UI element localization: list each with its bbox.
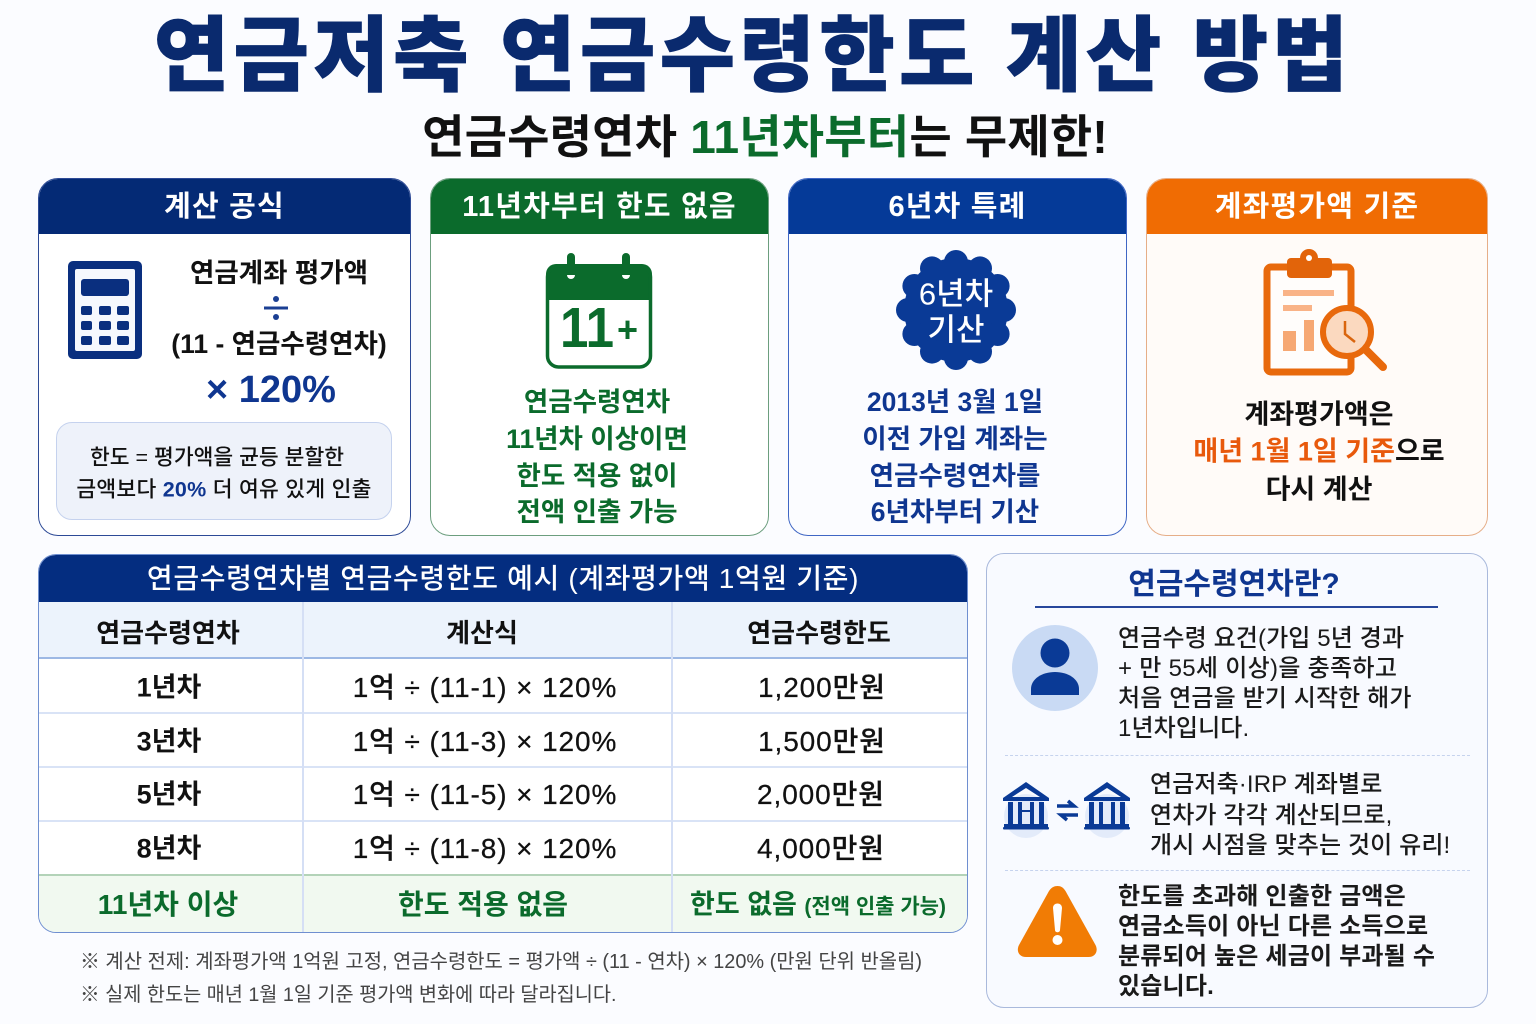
text: 다시 계산 [1266,474,1372,504]
text: 개시 시점을 맞추는 것이 유리! [1150,832,1450,859]
text: 연금수령한도 [747,618,891,648]
table: limit examples [38,554,968,933]
heading: formula: 계산 공식 [164,191,285,223]
column dividers [302,602,304,933]
text: 1년차입니다. [1118,715,1249,742]
text: 연차가 각각 계산되므로, [1150,802,1392,829]
highlighted row [39,874,969,934]
formula denominator: (11 - 연금수령연차) [171,329,387,359]
row: year 11+: 11년차 이상 [98,889,238,920]
badge text: 6년차 [919,276,993,312]
icon: calendar 11+: + [617,309,638,350]
icon: calendar 11+ [546,253,652,369]
multiplier: × 120% [206,369,336,411]
heading: year 6 [788,178,1127,234]
text: 1,500만원 [758,726,886,757]
text: 2,000만원 [757,779,885,810]
dashed divider 2 [1005,870,1470,871]
panel: year 6 exception [788,178,1127,536]
text: 분류되어 높은 세금이 부과될 수 [1118,943,1435,970]
row: year 1: 1년차 [137,672,201,702]
text: 매년 1월 1일 기준으로 [1193,436,1445,466]
title: 연금저축 연금수령한도 계산 방법 [154,11,1352,102]
text: 1억 ÷ (11-5) × 120% [353,779,617,810]
footnote 2: ※ 실제 한도는 매년 1월 1일 기준 평가액 변화에 따라 달라집니다. [80,984,616,1006]
icon: person [1012,625,1098,711]
heading underline [1035,606,1438,608]
dashed divider 1 [1005,755,1470,756]
text: + 만 55세 이상)을 충족하고 [1118,655,1397,682]
table title bar: 연금수령연차별 연금수령한도 예시 (계좌평가액 1억원 기준) [147,563,859,594]
heading: year 6: 6년차 특례 [888,191,1027,223]
text: 한도 적용 없음 [398,889,568,920]
row dividers [39,712,969,714]
table header labels: 연금수령연차 [96,618,240,648]
text: 전액 인출 가능 [516,497,678,527]
text: 1억 ÷ (11-8) × 120% [353,833,617,864]
row: year 3: 3년차 [137,726,201,756]
callout: limit explanation [56,422,392,520]
text: 4,000만원 [757,833,885,864]
formula numerator: 연금계좌 평가액 [190,258,368,288]
text: 연금수령연차를 [870,461,1040,491]
text: 11년차 이상이면 [506,424,688,454]
text: 6년차부터 기산 [871,497,1039,527]
row: year 5: 5년차 [137,780,201,810]
panel heading: 연금수령연차란? [1128,568,1340,601]
heading: formula [38,178,411,234]
panel: valuation basis [1146,178,1488,536]
icon: calendar 11+: 11 [560,296,614,360]
panel: calculation formula [38,178,411,536]
heading: valuation: 계좌평가액 기준 [1215,191,1419,223]
year 11 description: 연금수령연차 [524,387,670,417]
text: 처음 연금을 받기 시작한 해가 [1118,685,1412,712]
year 6 description: 2013년 3월 1일 [867,387,1043,417]
icon: calculator [68,261,142,359]
panel: no limit from year 11 [430,178,769,536]
text: 연금소득이 아닌 다른 소득으로 [1118,913,1428,940]
heading: no limit: 11년차부터 한도 없음 [462,191,737,223]
text: 한도 없음 (전액 인출 가능) [690,890,946,920]
icon: two banks with arrows [1003,782,1130,838]
text: 이전 가입 계좌는 [862,424,1048,454]
table header row [39,602,969,659]
icon: clipboard with magnifier [1264,249,1387,376]
subtitle: 연금수령연차 11년차부터는 무제한! [422,111,1108,163]
icon: scalloped badge [896,250,1016,370]
divide sign [264,296,288,320]
row: year 8: 8년차 [137,834,201,864]
text: 있습니다. [1118,973,1214,1000]
text: 계산식 [446,618,518,648]
panel: what is the pension year [986,553,1488,1008]
valuation description: 계좌평가액은 [1244,400,1394,430]
callout line 1: 한도 = 평가액을 균등 분할한 [90,445,344,469]
text: 1억 ÷ (11-1) × 120% [353,672,617,703]
text: 1,200만원 [758,672,886,703]
footnote 1: ※ 계산 전제: 계좌평가액 1억원 고정, 연금수령한도 = 평가액 ÷ (11 - 연차) × 120% (만원 단위 반올림) [80,951,922,973]
text: warning: 한도를 초과해 인출한 금액은 [1118,883,1406,910]
text: 1억 ÷ (11-3) × 120% [353,726,617,757]
table title bar [38,554,968,602]
text: 기산 [927,312,985,348]
icon: warning triangle [1018,886,1097,957]
heading: valuation [1146,178,1488,234]
heading: no limit [430,178,769,234]
text: requirement: 연금수령 요건(가입 5년 경과 [1118,625,1404,652]
text: 한도 적용 없이 [516,461,678,491]
text: per-account note: 연금저축·IRP 계좌별로 [1150,771,1382,798]
callout line 2: 금액보다 20% 더 여유 있게 인출 [76,477,372,501]
